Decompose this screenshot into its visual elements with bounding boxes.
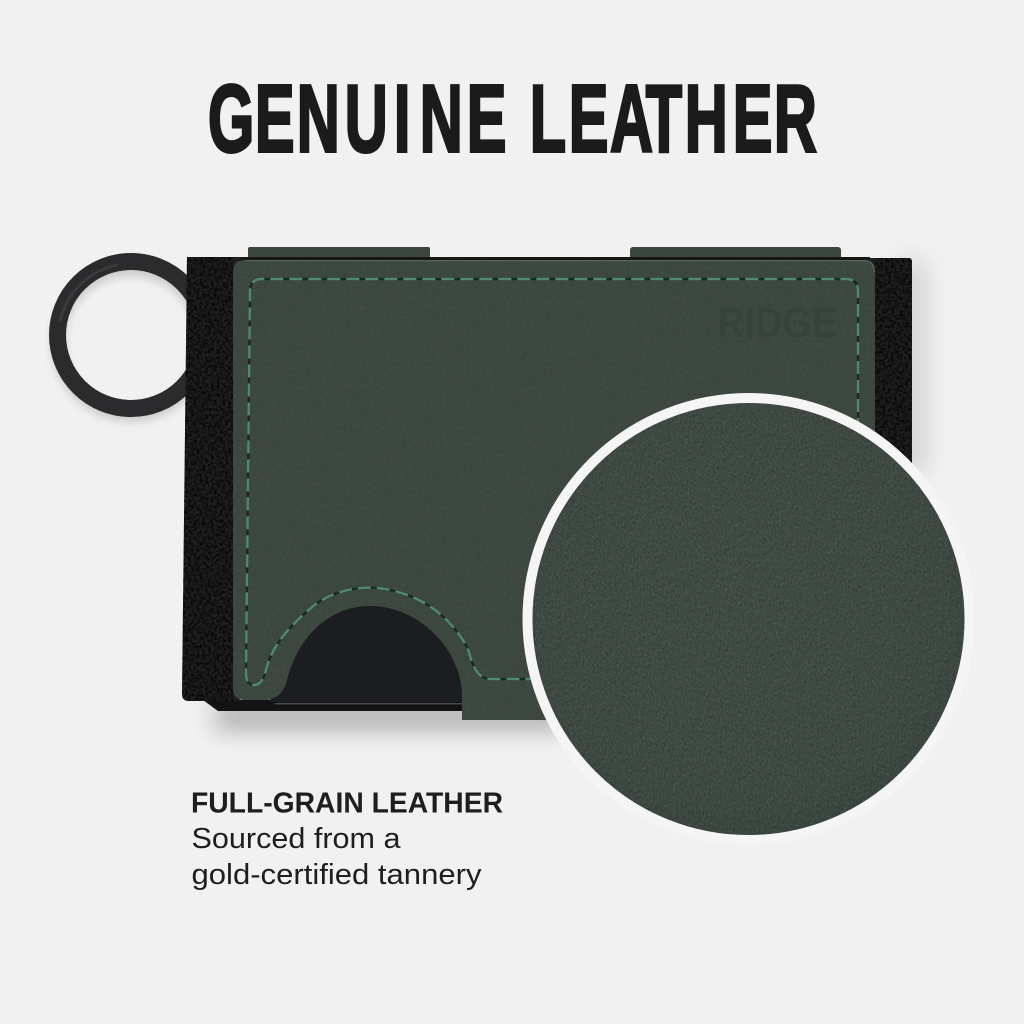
black card under wallet	[203, 700, 462, 711]
slot edge	[275, 703, 462, 704]
caption line 1: Sourced from a	[192, 823, 401, 855]
embossed RIDGE logo: RIDGE	[717, 299, 837, 347]
title: GENUINE LEATHER	[208, 65, 817, 172]
caption heading: FULL-GRAIN LEATHER	[191, 788, 503, 820]
leather front panel	[233, 260, 876, 720]
elastic band	[180, 257, 912, 701]
stitching	[246, 279, 858, 685]
magnified leather grain circle	[522, 393, 964, 835]
card slot opening	[270, 600, 470, 702]
wallet drop shadow	[215, 262, 922, 730]
top leather tabs	[248, 247, 841, 267]
wallet illustration	[58, 247, 922, 730]
key ring	[58, 262, 204, 415]
caption	[191, 788, 503, 891]
caption line 2: gold-certified tannery	[192, 859, 482, 891]
